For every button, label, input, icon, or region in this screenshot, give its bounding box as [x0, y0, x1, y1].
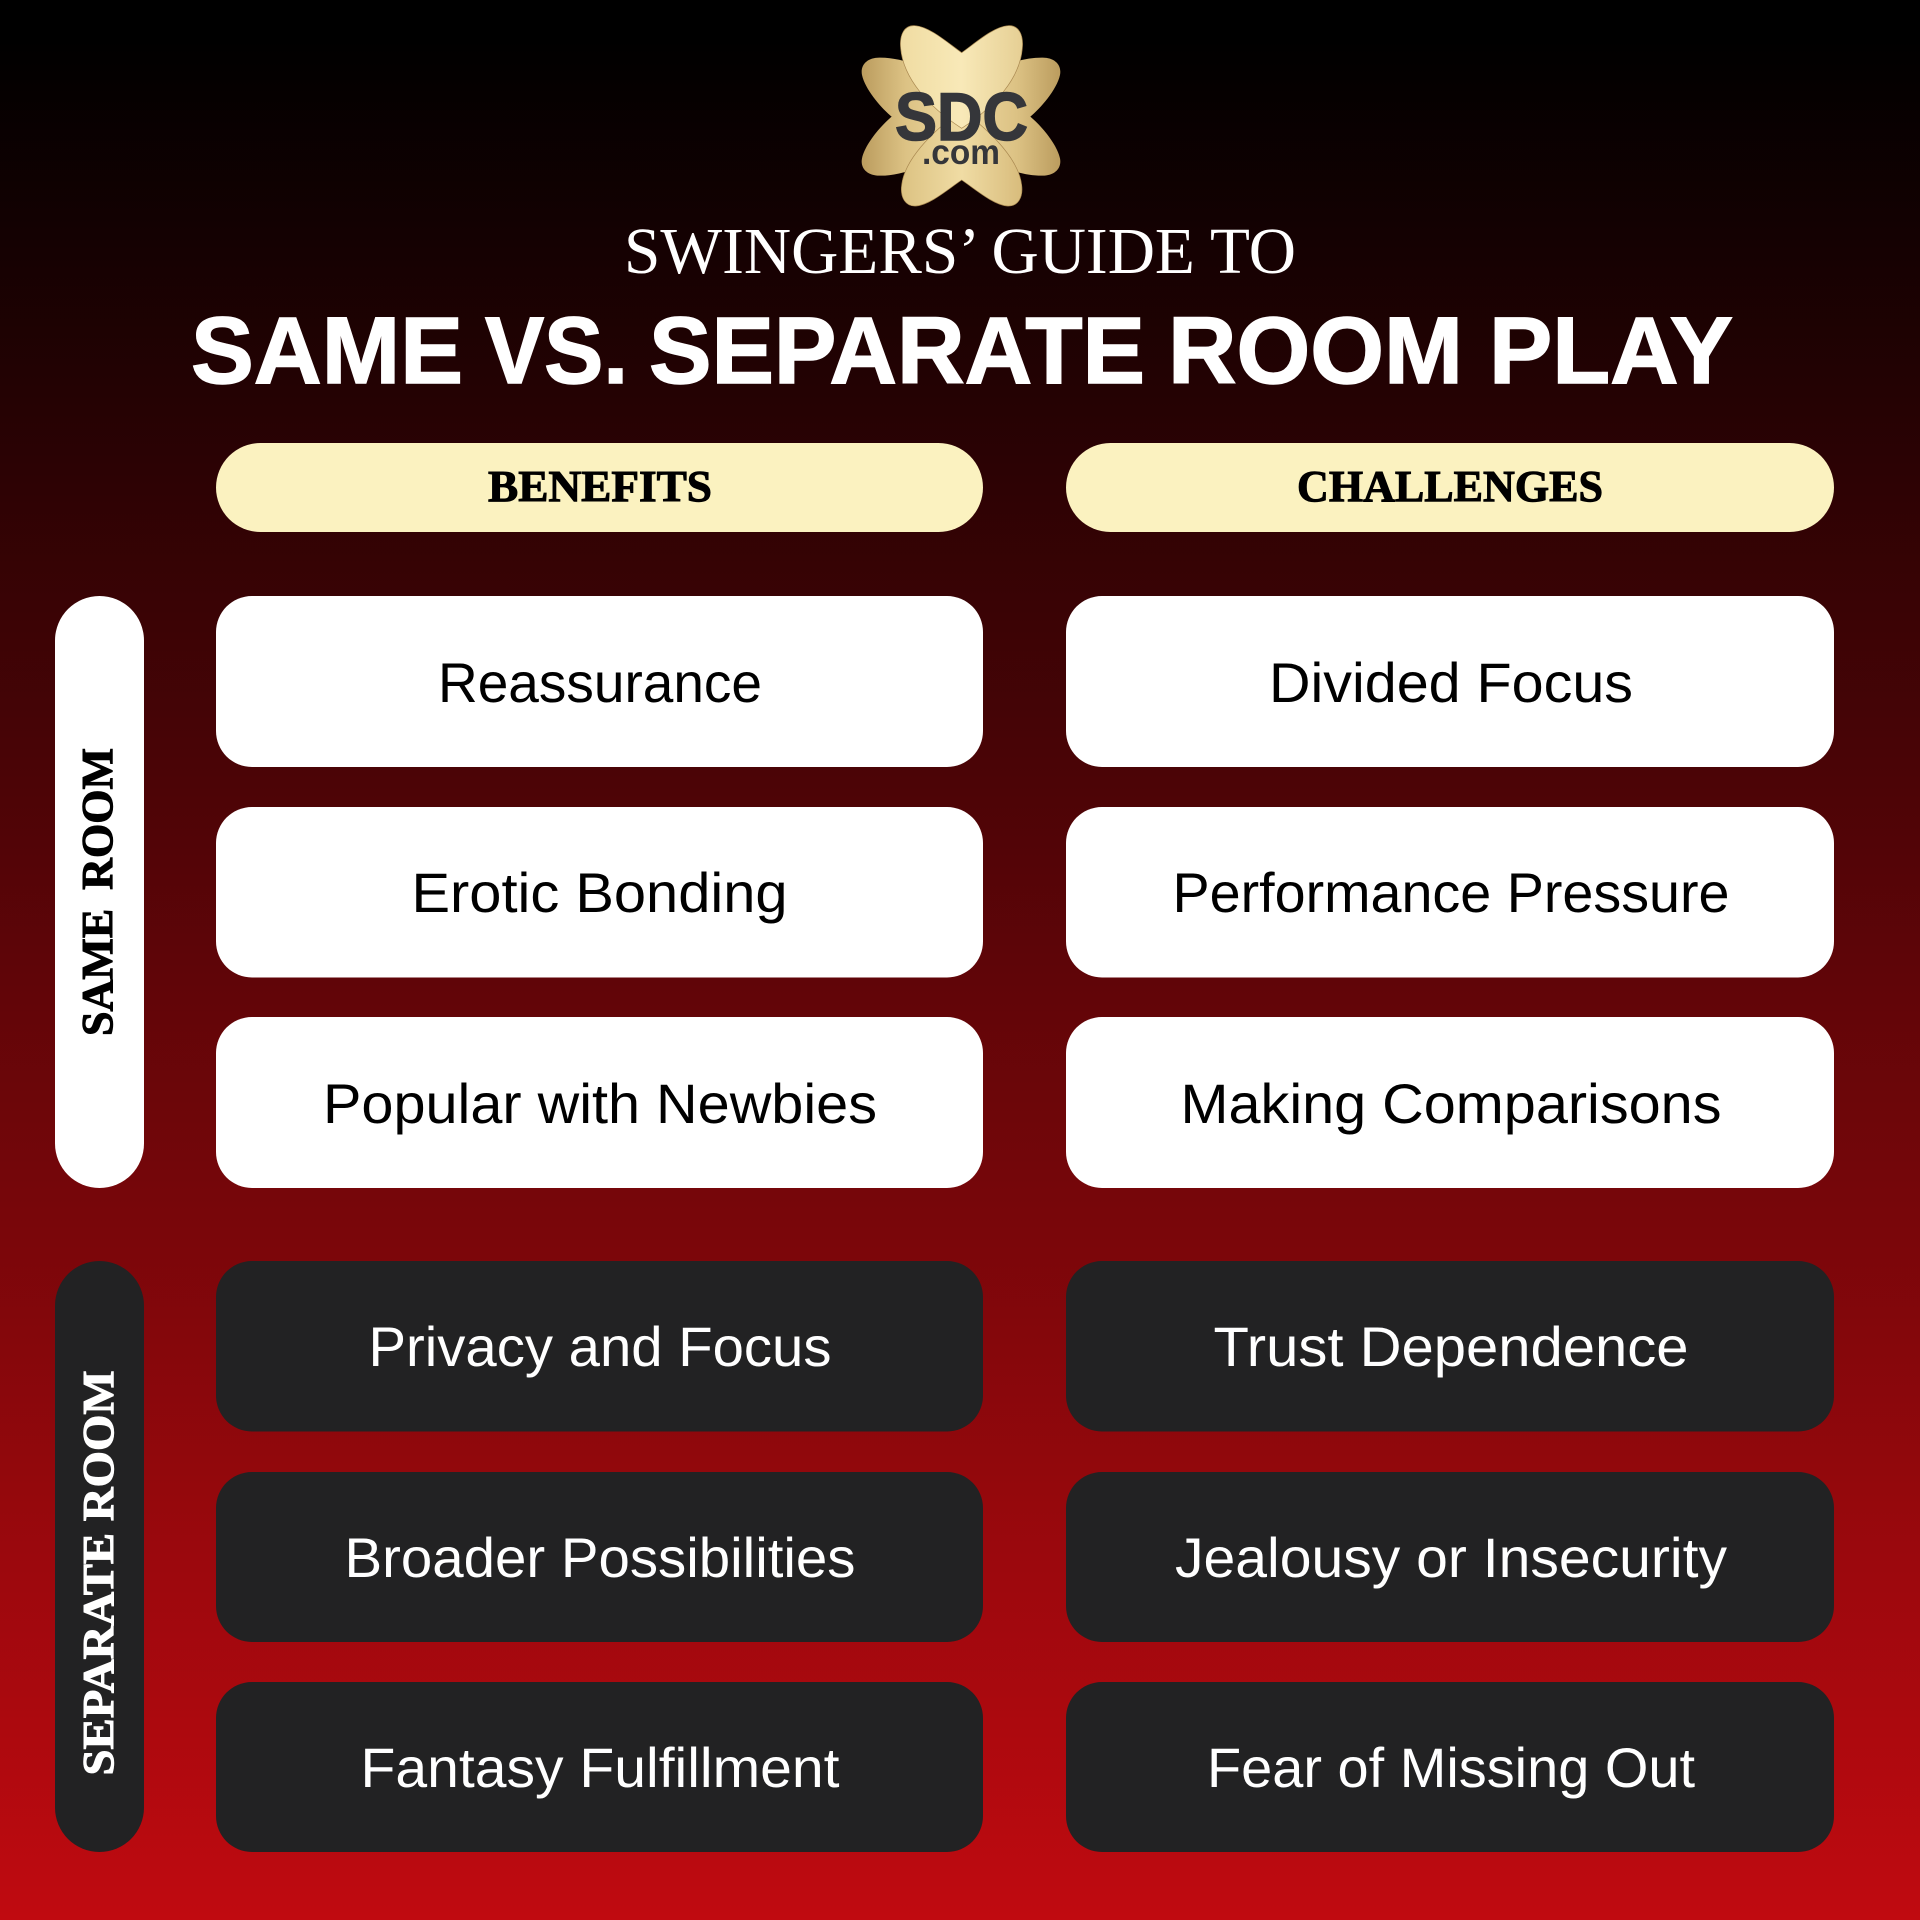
card: Privacy and Focus	[216, 1261, 983, 1432]
row label: separate room	[55, 1261, 144, 1852]
card: Jealousy or Insecurity	[1066, 1472, 1834, 1642]
card: Broader Possibilities: Broader Possibilities	[344, 1526, 856, 1589]
card: Performance Pressure	[1066, 807, 1834, 978]
column header: benefits	[216, 443, 983, 532]
card: Making Comparisons	[1066, 1017, 1834, 1188]
panel: separate room benefits	[216, 1261, 983, 1852]
card: Erotic Bonding	[216, 807, 983, 978]
row label: same room	[55, 596, 144, 1188]
title	[191, 298, 1733, 404]
card: Popular with Newbies	[216, 1017, 983, 1188]
icon: SDC.com gold flower logo	[862, 26, 1060, 206]
card: Trust Dependence: Trust Dependence	[1214, 1315, 1688, 1378]
title: PLAY	[1489, 298, 1733, 404]
card: Divided Focus	[1066, 596, 1834, 767]
column header: challenges	[1066, 443, 1834, 532]
title: VS.	[485, 298, 628, 404]
card: Jealousy or Insecurity: Jealousy or Insecurity	[1175, 1526, 1727, 1589]
card: Divided Focus: Divided Focus	[1269, 651, 1633, 714]
card: Privacy and Focus: Privacy and Focus	[368, 1315, 832, 1378]
card: Performance Pressure: Performance Pressure	[1172, 861, 1730, 924]
column header: benefits: BENEFITS	[488, 462, 712, 511]
panel: separate room challenges	[1066, 1261, 1834, 1852]
card: Fear of Missing Out: Fear of Missing Out	[1207, 1736, 1695, 1799]
logo wordmark .com: .com	[922, 133, 1000, 172]
row label: separate room: SEPARATE ROOM	[74, 1371, 123, 1775]
title: SAME	[191, 298, 463, 404]
title: ROOM	[1168, 298, 1463, 404]
card: Fear of Missing Out	[1066, 1682, 1834, 1852]
panel: same room benefits	[216, 596, 983, 1188]
card: Reassurance: Reassurance	[438, 651, 762, 714]
card: Broader Possibilities	[216, 1472, 983, 1642]
card: Making Comparisons: Making Comparisons	[1180, 1072, 1722, 1135]
logo wordmark SDC: SDC	[895, 79, 1028, 155]
card: Popular with Newbies: Popular with Newbies	[323, 1072, 877, 1135]
card: Fantasy Fulfillment: Fantasy Fulfillment	[360, 1736, 840, 1799]
card: Trust Dependence	[1066, 1261, 1834, 1432]
title: SEPARATE	[649, 298, 1145, 404]
card: Erotic Bonding: Erotic Bonding	[412, 861, 788, 924]
panel: same room challenges	[1066, 596, 1834, 1188]
card: Fantasy Fulfillment	[216, 1682, 983, 1852]
card: Reassurance	[216, 596, 983, 767]
row label: same room: SAME ROOM	[73, 748, 122, 1036]
column header: challenges: CHALLENGES	[1297, 462, 1603, 511]
subtitle: SWINGERS’ GUIDE TO	[624, 215, 1296, 288]
